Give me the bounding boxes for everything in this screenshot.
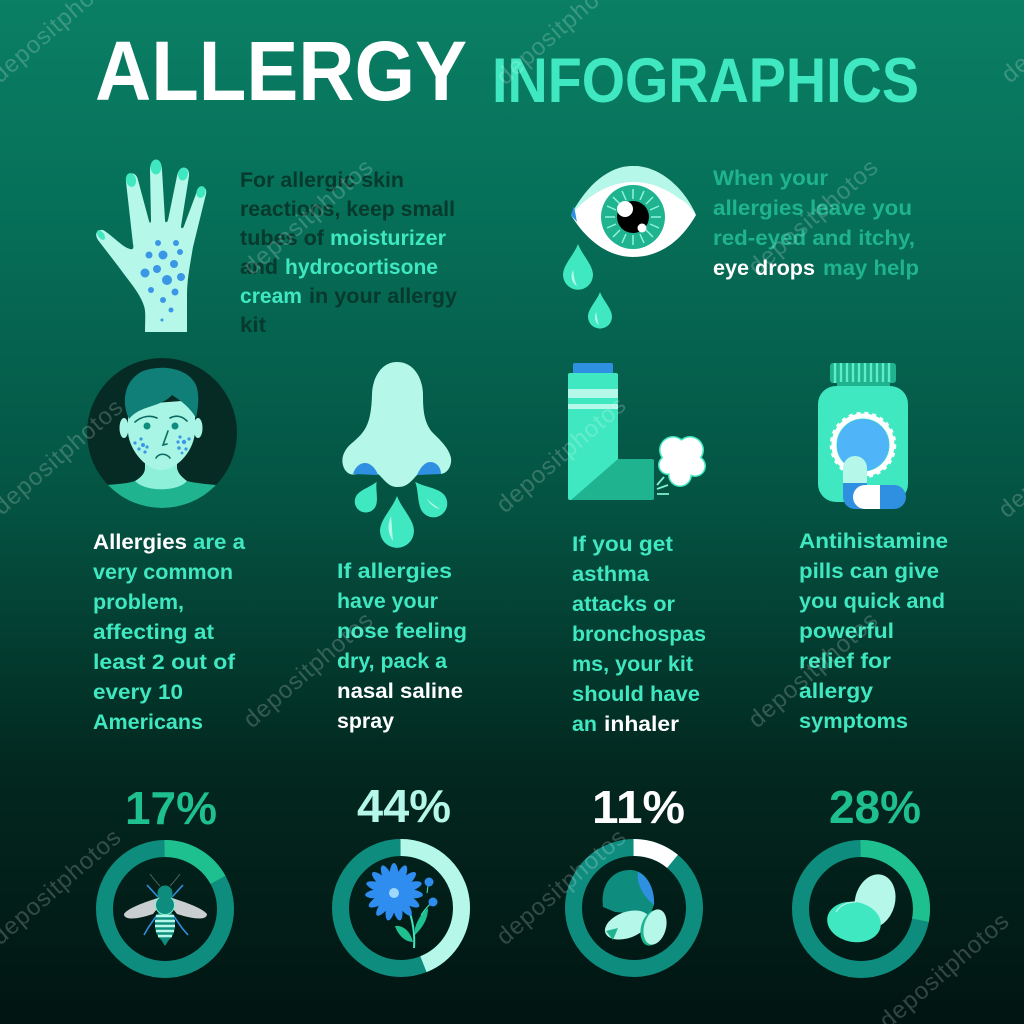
text: skin reactions: in your allergy <box>309 285 457 308</box>
title: ALLERGY <box>95 24 467 118</box>
value: 44%: 44% <box>357 780 451 832</box>
text: allergies are common: Americans <box>93 711 203 734</box>
text: skin reactions: reactions, keep small <box>240 198 455 221</box>
title <box>95 24 919 118</box>
watermark: depositphotos <box>743 607 883 734</box>
text: inhaler: asthma <box>572 563 649 586</box>
text: skin reactions: tubes of <box>240 227 325 250</box>
text: antihistamine pills <box>799 530 948 733</box>
text: inhaler: an <box>572 713 597 736</box>
text: antihistamine pills: symptoms <box>799 710 908 733</box>
text: allergies are common: affecting at <box>93 621 214 644</box>
text: skin reactions: hydrocortisone <box>285 256 438 279</box>
icon: bee <box>124 874 207 946</box>
icon: watery eye <box>563 166 696 329</box>
text: skin reactions: and <box>240 256 278 279</box>
icon: flower <box>365 863 438 948</box>
text: allergies are common: problem, <box>93 591 184 614</box>
icon: inhaler <box>568 363 706 500</box>
text: allergies are common: every 10 <box>93 681 183 704</box>
text: nasal saline spray: If allergies <box>337 560 452 583</box>
watermark: depositphotos <box>491 824 631 951</box>
text: inhaler: bronchospas <box>572 623 706 646</box>
text: antihistamine pills: powerful <box>799 620 894 643</box>
text: inhaler: inhaler <box>604 713 679 736</box>
stat: 17% insects <box>104 782 226 970</box>
donut: 17% <box>104 848 226 970</box>
icon: pill bottle <box>818 363 908 509</box>
title: INFOGRAPHICS <box>492 46 919 116</box>
text: eye drops: may help <box>823 257 919 280</box>
value: 17%: 17% <box>125 782 217 834</box>
text: nasal saline spray: spray <box>337 710 394 733</box>
text: skin reactions <box>240 169 457 337</box>
icon: hand with skin rash <box>95 160 207 332</box>
text: eye drops: eye drops <box>713 257 815 280</box>
text: skin reactions: moisturizer <box>330 227 446 250</box>
stat: 11% nuts <box>574 781 694 968</box>
text: antihistamine pills: Antihistamine <box>799 530 948 553</box>
text: eye drops: red-eyed and itchy, <box>713 227 915 250</box>
donut: 28% <box>800 848 922 970</box>
text: nasal saline spray: have your <box>337 590 438 613</box>
icon: runny nose <box>342 362 453 548</box>
text: antihistamine pills: allergy <box>799 680 873 703</box>
value: 11%: 11% <box>592 781 685 833</box>
watermark: depositphotos <box>238 154 378 281</box>
text: skin reactions: kit <box>240 314 266 337</box>
text: inhaler: ms, your kit <box>572 653 693 676</box>
icon: eggs <box>824 870 901 946</box>
text: skin reactions: For allergic skin <box>240 169 404 192</box>
text: allergies are common: Allergies <box>93 531 187 554</box>
donut: 11% <box>574 848 694 968</box>
text: antihistamine pills: you quick and <box>799 590 945 613</box>
watermark: depositphotos <box>491 392 631 519</box>
text: inhaler <box>572 533 706 736</box>
text: eye drops <box>713 167 919 280</box>
text: nasal saline spray: nose feeling <box>337 620 467 643</box>
icon: person with allergic rash <box>87 358 237 520</box>
watermark: depositphotos <box>743 154 883 281</box>
text: allergies are common <box>93 531 245 734</box>
text: allergies are common: very common <box>93 561 233 584</box>
text: nasal saline spray: nasal saline <box>337 680 463 703</box>
text: allergies are common: are a <box>193 531 245 554</box>
text: inhaler: If you get <box>572 533 673 556</box>
text: skin reactions: cream <box>240 285 302 308</box>
donut: 44% <box>340 848 462 968</box>
text: inhaler: should have <box>572 683 700 706</box>
stat: 44% pollen <box>340 780 462 968</box>
text: inhaler: attacks or <box>572 593 675 616</box>
icon: nuts <box>601 870 670 948</box>
value: 28%: 28% <box>829 781 921 833</box>
text: allergies are common: least 2 out of <box>93 651 236 674</box>
text: antihistamine pills: pills can give <box>799 560 939 583</box>
text: eye drops: When your <box>713 167 828 190</box>
text: nasal saline spray: dry, pack a <box>337 650 447 673</box>
text: eye drops: allergies leave you <box>713 197 912 220</box>
stat: 28% eggs <box>800 781 922 970</box>
text: nasal saline spray <box>337 560 467 733</box>
watermark: depositphotos <box>238 607 378 734</box>
text: antihistamine pills: relief for <box>799 650 891 673</box>
